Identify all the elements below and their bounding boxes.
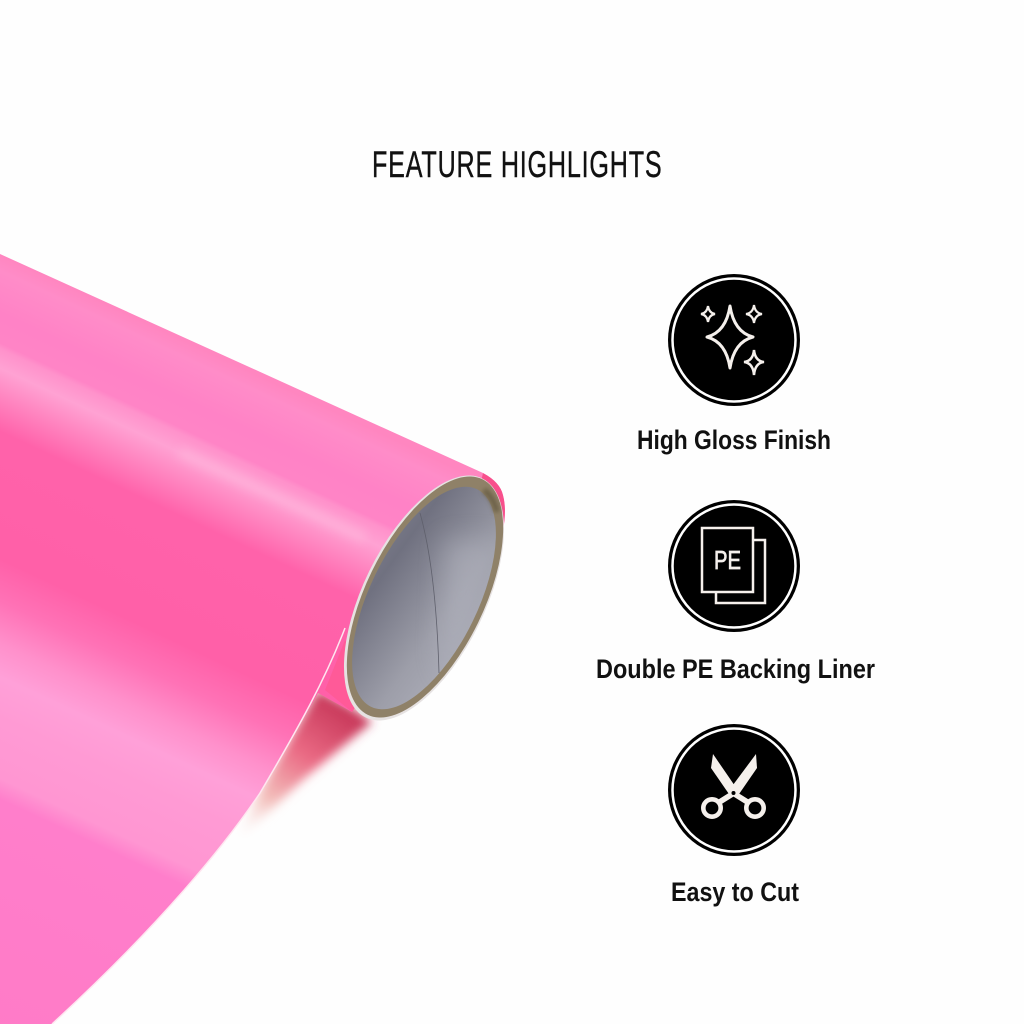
- icon: PE sheets: [668, 500, 800, 632]
- icon: sparkles: [668, 274, 800, 406]
- icon: scissors: [668, 724, 800, 856]
- label: Easy to Cut: [671, 877, 799, 907]
- feature: easy to cut: [668, 724, 800, 907]
- core interior light side: [440, 538, 486, 620]
- core seam: [420, 513, 439, 673]
- feature: double PE backing liner: [596, 500, 875, 684]
- title: FEATURE HIGHLIGHTS: [372, 143, 662, 185]
- roll shadow: [236, 690, 372, 842]
- sheet edge: [52, 628, 345, 1024]
- label: Double PE Backing Liner: [596, 654, 875, 684]
- core rim: [311, 452, 537, 744]
- core worn rim: [484, 490, 497, 512]
- product: pink vinyl roll: [0, 240, 537, 1024]
- icon: PE sheets: PE: [714, 545, 741, 575]
- label: High Gloss Finish: [637, 425, 831, 455]
- vinyl sheet: [0, 240, 520, 1024]
- feature: high gloss finish: [637, 274, 831, 455]
- core interior: [322, 466, 526, 730]
